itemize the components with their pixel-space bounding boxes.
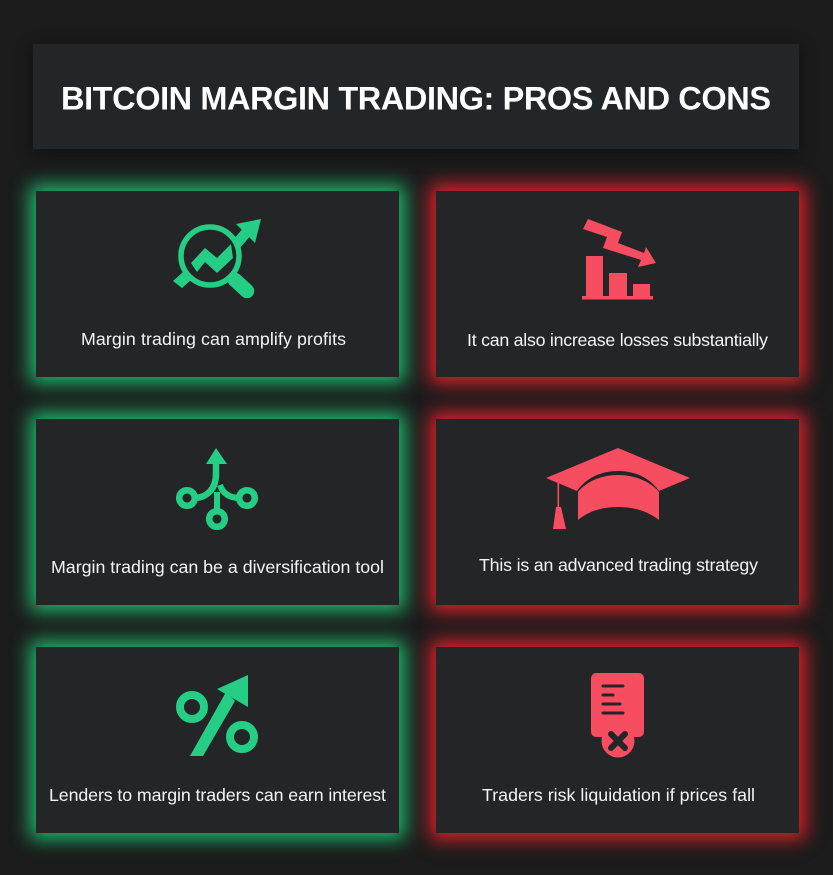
caption: Traders risk liquidation if prices fall xyxy=(482,785,755,805)
panel: pro, diversification xyxy=(36,419,399,605)
icon: magnifier with rising arrow xyxy=(173,219,261,291)
caption: This is an advanced trading strategy xyxy=(479,555,758,575)
caption: Margin trading can be a diversification tool xyxy=(51,557,384,577)
icon: graduation cap xyxy=(546,448,690,529)
icon: falling bar chart xyxy=(582,219,656,300)
icon: document with cross xyxy=(591,673,644,758)
icon: percent with arrow xyxy=(180,675,254,756)
caption: Margin trading can amplify profits xyxy=(81,329,346,349)
title panel xyxy=(33,44,799,149)
icon: branching arrow xyxy=(179,448,255,527)
title text: BITCOIN MARGIN TRADING: PROS AND CONS xyxy=(61,80,771,116)
caption: Lenders to margin traders can earn interest xyxy=(49,785,386,805)
panel: pro, amplify profits xyxy=(36,191,399,377)
panel: pro, earn interest xyxy=(36,647,399,833)
panel: con, increased losses xyxy=(436,191,799,377)
caption: It can also increase losses substantially xyxy=(467,330,768,350)
panel: con, advanced strategy xyxy=(436,419,799,605)
panel: con, liquidation xyxy=(436,647,799,833)
